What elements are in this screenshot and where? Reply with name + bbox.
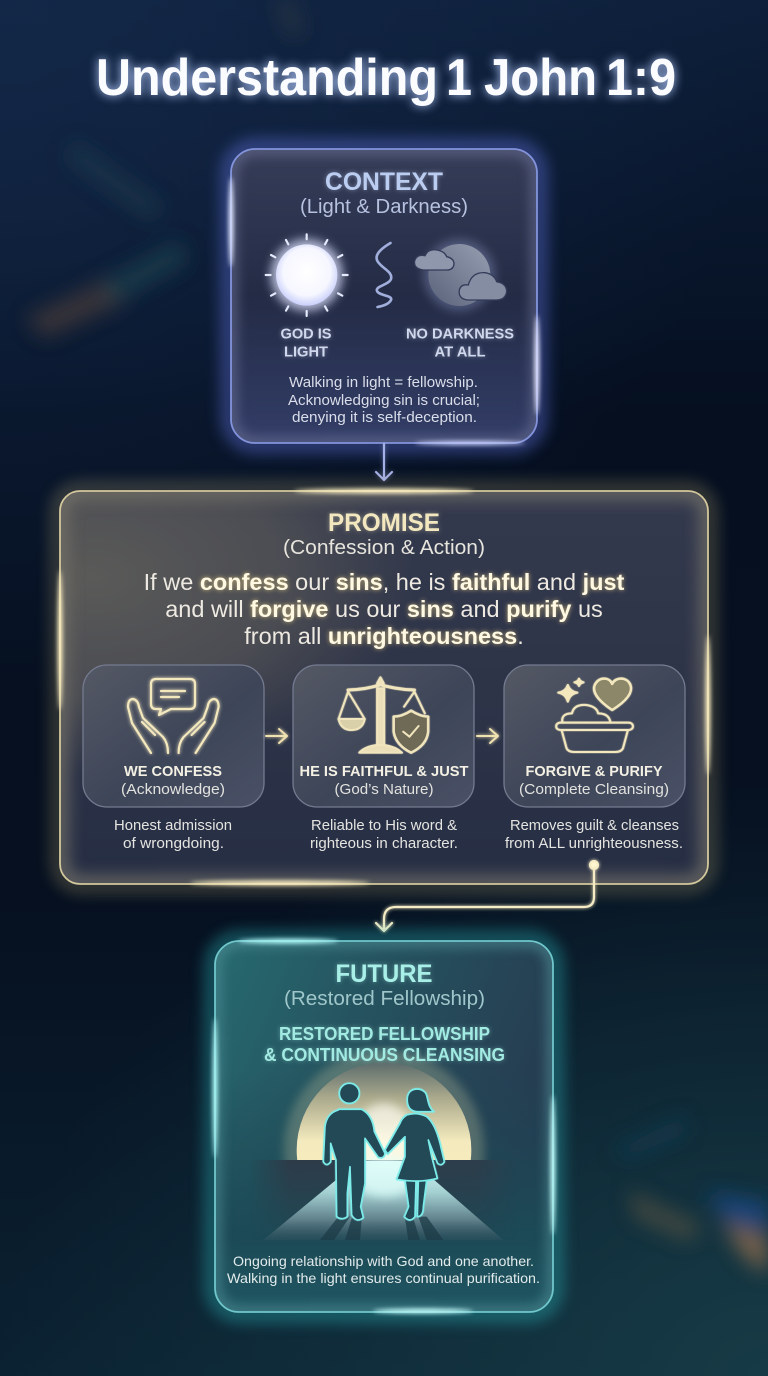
card subtitle: complete cleansing: (Complete Cleansing) — [519, 782, 669, 798]
callout: restored fellowship and continuous cleansing: & CONTINUOUS CLEANSING — [264, 1045, 505, 1065]
label: god is light: LIGHT — [284, 344, 328, 360]
heading: context: CONTEXT — [325, 168, 443, 196]
context description — [288, 375, 480, 426]
icon: open hands and speech bubble — [128, 679, 219, 753]
icon: wavy divider — [377, 243, 391, 307]
label: god is light: GOD IS — [280, 326, 332, 342]
future description: Ongoing relationship with God and one another. — [233, 1253, 534, 1269]
arrow: confess to faithful — [266, 729, 287, 743]
card title: forgive and purify: FORGIVE & PURIFY — [526, 763, 662, 780]
subheading: light and darkness: (Light & Darkness) — [300, 196, 468, 218]
title: John — [484, 49, 597, 107]
arrow: promise to future — [376, 861, 598, 931]
label: god is light — [280, 326, 332, 360]
description: we confess: Honest admission — [114, 818, 232, 834]
callout: restored fellowship and continuous cleansing — [264, 1024, 505, 1065]
card title: we confess: WE CONFESS — [124, 763, 222, 780]
panel: context — [228, 147, 540, 445]
arrow: faithful to forgive — [477, 729, 498, 743]
icon: sun — [266, 234, 348, 316]
description: faithful and just: righteous in character. — [310, 836, 458, 852]
description: forgive and purify: from ALL unrighteousness. — [505, 836, 683, 852]
subheading: confession and action: (Confession & Action) — [283, 537, 485, 559]
title: 1:9 — [606, 49, 676, 107]
description: forgive and purify: Removes guilt & cleanses — [510, 818, 679, 834]
promise verse: If we confess our sins, he is faithful and just — [144, 569, 624, 595]
promise verse — [100, 569, 668, 653]
icon: basin, heart and sparkles — [556, 679, 633, 752]
context description: denying it is self-deception. — [292, 410, 477, 426]
description: faithful and just — [310, 818, 458, 852]
description: faithful and just: Reliable to His word & — [311, 818, 457, 834]
card: forgive and purify — [504, 665, 685, 807]
figure: woman — [385, 1089, 444, 1220]
card: we confess — [83, 665, 264, 807]
future description — [227, 1253, 540, 1286]
title: 1 — [446, 49, 472, 107]
card title: faithful and just: HE IS FAITHFUL & JUST — [300, 763, 468, 780]
description: we confess: of wrongdoing. — [123, 836, 224, 852]
title — [96, 49, 676, 107]
arrow: context to promise — [376, 444, 392, 480]
description: we confess — [114, 818, 232, 852]
title: Understanding — [96, 49, 438, 107]
heading: future: FUTURE — [336, 960, 432, 988]
context description: Walking in light = fellowship. — [289, 375, 478, 391]
subheading: restored fellowship: (Restored Fellowship) — [284, 988, 485, 1010]
label: no darkness at all: NO DARKNESS — [406, 326, 514, 342]
label: no darkness at all: AT ALL — [434, 344, 486, 360]
panel: future — [212, 938, 556, 1314]
callout: restored fellowship and continuous cleansing: RESTORED FELLOWSHIP — [279, 1024, 490, 1044]
context description: Acknowledging sin is crucial; — [288, 393, 480, 409]
heading: promise: PROMISE — [328, 509, 440, 537]
card subtitle: acknowledge: (Acknowledge) — [121, 782, 225, 798]
label: no darkness at all — [406, 326, 514, 360]
icon: moon and clouds — [415, 239, 507, 311]
promise verse: and will forgive us our sins and purify us — [165, 596, 603, 622]
illustration: couple walking toward the light — [264, 1046, 502, 1240]
panel: promise — [58, 488, 710, 886]
figure: man — [323, 1083, 385, 1220]
card subtitle: god's nature: (God’s Nature) — [334, 782, 434, 798]
icon: scales and shield — [339, 677, 428, 753]
card: faithful and just — [293, 665, 474, 807]
description: forgive and purify — [505, 818, 683, 852]
promise verse: from all unrighteousness. — [244, 623, 524, 649]
future description: Walking in the light ensures continual purification. — [227, 1270, 540, 1286]
